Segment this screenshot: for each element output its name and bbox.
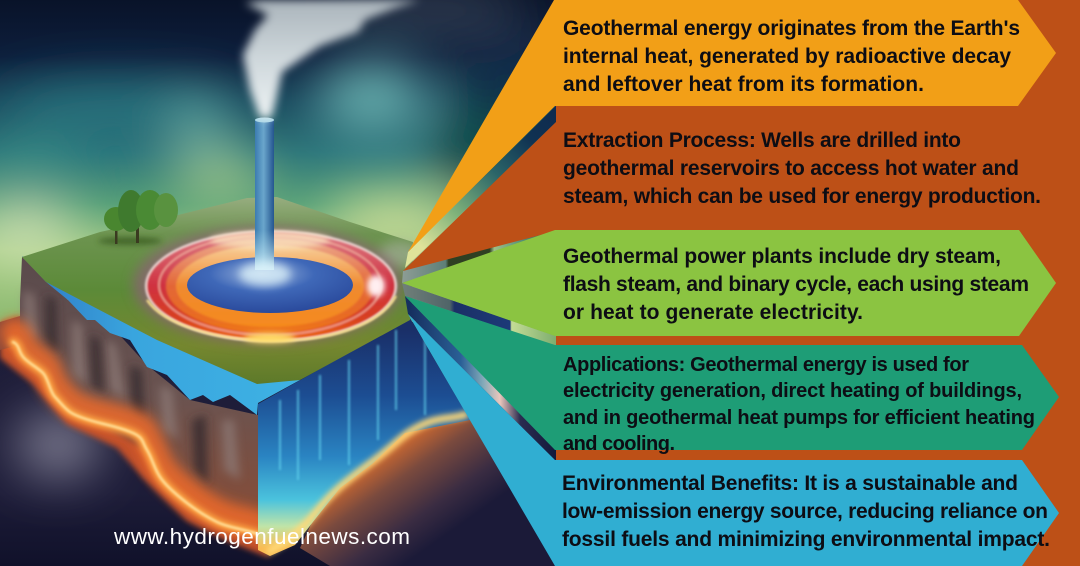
panel: extraction process (brown) (403, 122, 1041, 271)
text: applications: and cooling. (563, 433, 675, 455)
background panel: right column (555, 0, 1080, 566)
blue right face (258, 318, 470, 556)
text: applications: Applications: Geothermal energy is used for (563, 354, 969, 376)
text: environmental benefits (562, 472, 1050, 551)
water strip (22, 256, 300, 415)
text: extraction process: geothermal reservoirs to access hot water and (563, 157, 1019, 180)
text: environmental benefits: Environmental Benefits: It is a sustainable and (562, 472, 1018, 495)
text: environmental benefits: fossil fuels and minimizing environmental impact. (562, 528, 1050, 551)
website url: www.hydrogenfuelnews.com (113, 524, 410, 549)
text: power plants: or heat to generate electricity. (563, 301, 863, 324)
text: internal heat: Geothermal energy originates from the Earth's (563, 17, 1020, 40)
right lava mound (300, 416, 560, 566)
text: applications (563, 354, 1035, 455)
text: extraction process: steam, which can be used for energy production. (563, 185, 1041, 208)
tree cluster (98, 190, 178, 245)
text: internal heat: and leftover heat from its formation. (563, 73, 924, 96)
rock face (20, 257, 258, 533)
sky with clouds (0, 0, 556, 322)
blue pool (187, 257, 353, 313)
ground (0, 322, 556, 566)
steam plume (243, 0, 420, 118)
panel: power plants (green) (402, 230, 1056, 336)
panel: internal heat (orange) (408, 0, 1056, 252)
text: environmental benefits: low-emission energy source, reducing reliance on (562, 500, 1048, 523)
panel: environmental benefits (blue) (408, 314, 1059, 566)
illustration: geothermal cross-section (0, 0, 580, 566)
text: applications: electricity generation, direct heating of buildings, (563, 380, 1022, 402)
text: power plants: Geothermal power plants include dry steam, (563, 245, 1001, 268)
lava glow line (13, 333, 260, 534)
grass top (22, 197, 422, 384)
chimney (239, 118, 291, 286)
text: applications: and in geothermal heat pumps for efficient heating (563, 407, 1035, 429)
text: internal heat: internal heat, generated by radioactive decay (563, 45, 1011, 68)
image slivers between pointers (402, 106, 556, 461)
text: extraction process (563, 129, 1041, 208)
left lava flow (0, 316, 270, 558)
glowing rings around pool (133, 226, 403, 344)
text: power plants (563, 245, 1029, 324)
text: extraction process: Extraction Process: Wells are drilled into (563, 129, 961, 152)
text: internal heat (563, 17, 1020, 96)
text: power plants: flash steam, and binary cycle, each using steam (563, 273, 1029, 296)
panel: applications (teal) (405, 296, 1059, 455)
